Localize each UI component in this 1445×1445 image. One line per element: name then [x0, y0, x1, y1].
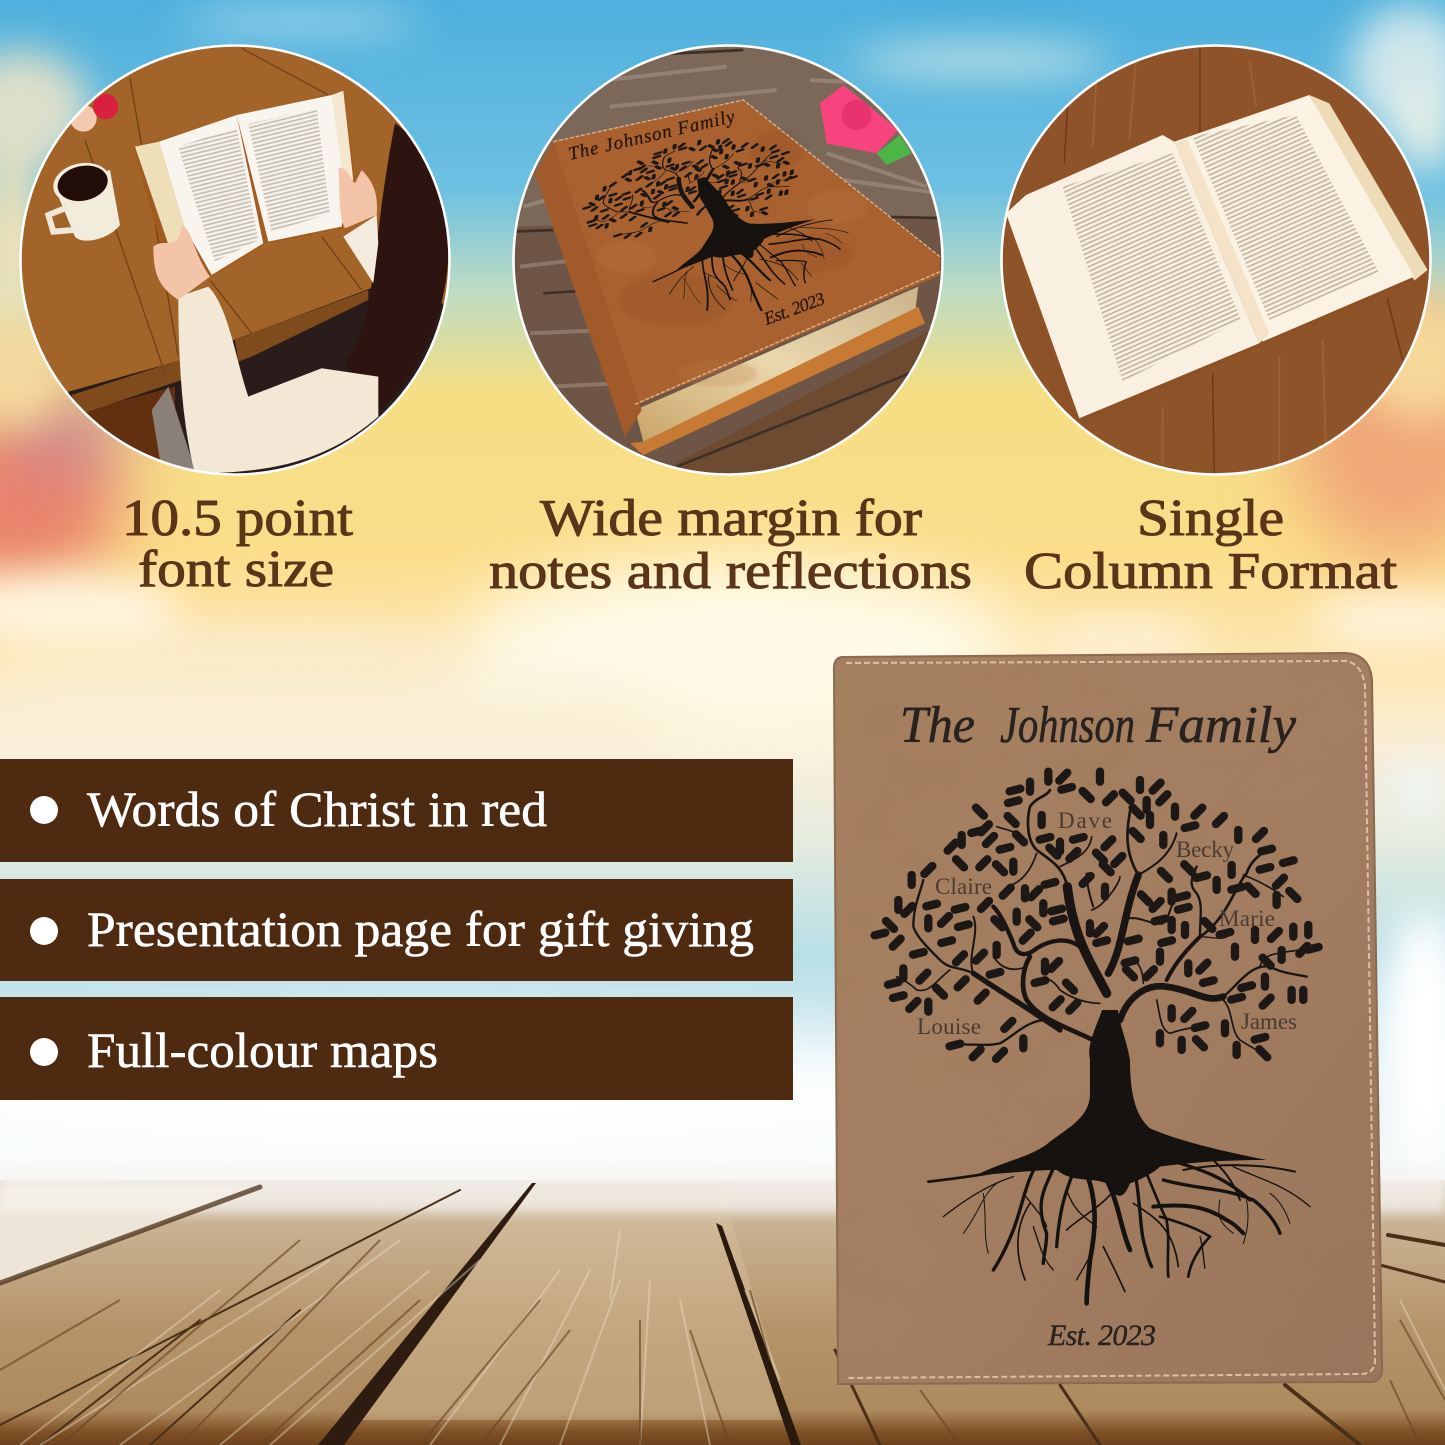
names on tree: Becky [1176, 837, 1234, 862]
names on tree: Louise [917, 1014, 981, 1039]
cover title: Johnson [1000, 697, 1135, 754]
book pages [635, 287, 918, 442]
caption: wide margin: notes and reflections [489, 543, 972, 600]
caption: font size [122, 490, 354, 598]
background: wooden table [0, 1168, 1445, 1445]
left page [1006, 135, 1259, 418]
names on tree: Marie [1219, 906, 1275, 931]
cover title: Family [1145, 697, 1297, 754]
feature bar: words of Christ: Words of Christ in red [87, 781, 547, 837]
flowers [70, 105, 97, 132]
established date: Est. 2023 [1047, 1319, 1156, 1352]
caption: font size: 10.5 point [122, 490, 354, 547]
photo circle: reader at table [15, 40, 455, 480]
floor under the table [68, 288, 444, 474]
book cover [535, 100, 940, 437]
names on tree: Claire [935, 874, 992, 899]
book side edge [1309, 95, 1428, 281]
names on tree [917, 808, 1297, 1039]
open book [133, 90, 355, 277]
sweater [178, 287, 378, 473]
names on tree: Dave [1058, 808, 1112, 833]
rose [820, 85, 898, 153]
hair [345, 123, 448, 410]
cover title [900, 697, 1297, 754]
names on tree: James [1241, 1009, 1297, 1034]
mini tree canopy [582, 138, 798, 239]
photo circle: engraved leather bible [510, 40, 950, 480]
tree canopy [875, 772, 1319, 1059]
photo circle: engraved leather bible: The Johnson Family [566, 106, 737, 165]
mini tree roots [652, 176, 849, 312]
table cracks [318, 1183, 536, 1445]
caption: wide margin: Wide margin for [540, 490, 922, 547]
caption: single column: Single [1137, 490, 1284, 547]
right page [1174, 95, 1414, 342]
feature bar: presentation page: Presentation page for gift giving [87, 901, 754, 957]
feature bar: words of Christ [0, 759, 793, 862]
engraved leather cover [834, 653, 1382, 1384]
feature bar: maps [0, 997, 793, 1100]
cover title: The [900, 697, 975, 754]
feature bar: presentation page [0, 879, 793, 981]
leaves [875, 772, 1319, 1059]
feature bar: maps: Full-colour maps [87, 1022, 438, 1078]
coffee cup [54, 170, 120, 241]
table front edge [72, 360, 182, 415]
hands [153, 227, 210, 300]
caption: single column [1024, 490, 1398, 600]
caption: wide margin [489, 490, 972, 600]
tree trunk and roots [928, 1010, 1310, 1303]
book underside [1386, 293, 1388, 298]
caption: single column: Column Format [1024, 543, 1398, 600]
caption: font size: font size [138, 541, 334, 598]
photo circle: single column page [996, 40, 1436, 480]
photo circle: engraved leather bible: Est. 2023 [760, 288, 828, 329]
branches [897, 790, 1307, 1057]
